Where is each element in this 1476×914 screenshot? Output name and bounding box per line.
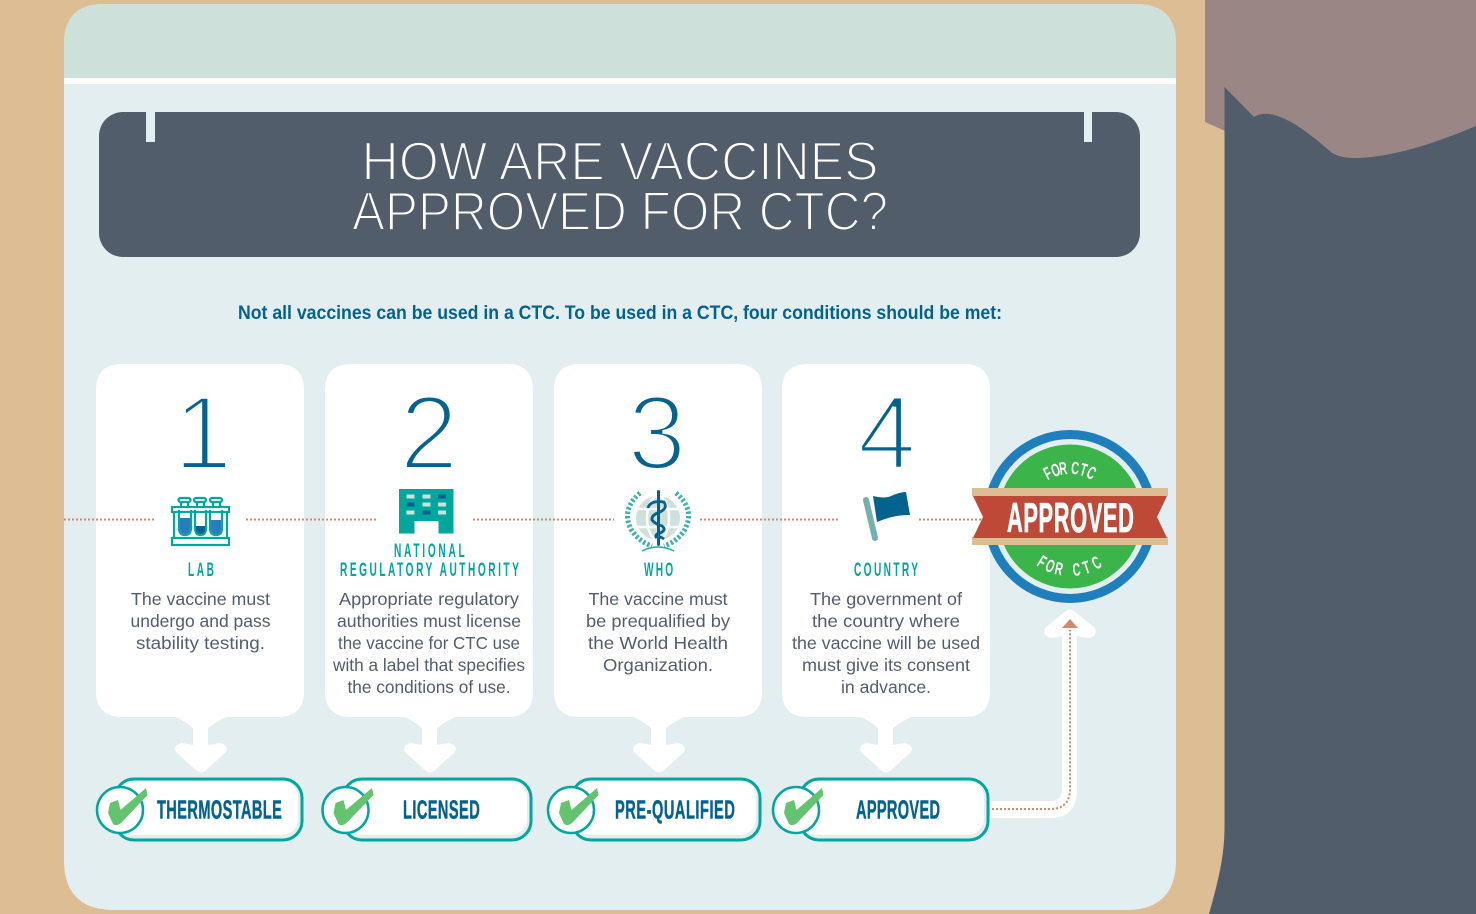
badge text top: C	[1083, 464, 1099, 484]
intro sentence: Not all vaccines can be used in a CTC. To be used in a CTC, four conditions should be met:	[238, 303, 1002, 324]
panel: step 2 national regulatory authority: the conditions of use.	[348, 677, 510, 697]
dark grey silhouette	[1209, 87, 1476, 914]
status tag: approved	[773, 779, 988, 840]
badge text top: O	[1049, 461, 1063, 482]
panel: step 3 WHO: The vaccine must	[588, 589, 728, 609]
mauve backdrop shape	[1205, 0, 1476, 170]
approved badge: APPROVED	[1007, 496, 1134, 542]
icon: regulatory building	[399, 489, 454, 534]
panel: step 2 national regulatory authority: NATIONAL	[394, 541, 465, 562]
status tag: licensed: LICENSED	[403, 796, 480, 825]
icon: flag	[866, 492, 910, 538]
panel: step 4 country: COUNTRY	[854, 560, 918, 581]
approved badge	[972, 434, 1168, 598]
status tag: approved: APPROVED	[856, 796, 940, 825]
panel: step 1 lab: LAB	[188, 560, 214, 581]
panel: step 2 national regulatory authority: with a label that specifies	[332, 655, 525, 675]
panel: step 1 lab: undergo and pass	[130, 611, 271, 631]
panel: step 4 country: in advance.	[841, 677, 931, 697]
badge text top: R	[1058, 459, 1069, 480]
status tag: thermostable: THERMOSTABLE	[157, 796, 282, 825]
panel: step 2 national regulatory authority: authorities must license	[337, 611, 521, 631]
badge text top: C	[1070, 459, 1080, 479]
title banner: HOW ARE VACCINES	[362, 131, 878, 192]
panel: step 4 country	[782, 364, 990, 772]
badge text top: T	[1077, 461, 1089, 481]
title banner: APPROVED FOR CTC?	[352, 181, 888, 242]
panel: step 2 national regulatory authority	[325, 364, 533, 772]
icon: WHO emblem	[628, 490, 688, 551]
badge text top: F	[1041, 464, 1056, 485]
connector arrow to approved badge	[990, 610, 1096, 818]
badge text bottom: O	[1042, 557, 1057, 578]
panel: step 3 WHO: be prequalified by	[586, 611, 730, 631]
panel: step 3 WHO: WHO	[644, 560, 673, 581]
badge text bottom: R	[1053, 560, 1065, 580]
panel: step 4 country: must give its consent	[802, 655, 970, 675]
badge text bottom: C	[1072, 561, 1082, 581]
title banner	[99, 112, 1140, 257]
status tag: thermostable	[97, 779, 302, 840]
status tag: pre-qualified: PRE-QUALIFIED	[615, 796, 735, 825]
panel: step 4 country: The government of	[810, 589, 962, 609]
icon: test tubes	[172, 498, 229, 545]
badge text bottom: C	[1089, 553, 1105, 574]
panel: step 4 country: 4	[858, 375, 916, 492]
badge text bottom	[1033, 553, 1105, 581]
panel: step 3 WHO: 3	[628, 375, 686, 492]
panel: step 2 national regulatory authority: REGULATORY AUTHORITY	[340, 560, 519, 581]
panel: step 1 lab	[96, 364, 304, 772]
panel: step 4 country: the vaccine will be used	[792, 633, 980, 653]
panel: step 2 national regulatory authority: the vaccine for CTC use	[338, 633, 520, 653]
badge text bottom: T	[1081, 558, 1093, 579]
panel: step 3 WHO: Organization.	[603, 655, 713, 675]
main panel	[64, 4, 1176, 910]
panel: step 3 WHO: the World Health	[588, 633, 728, 653]
badge text top	[1041, 459, 1099, 485]
dotted connector line	[64, 518, 985, 520]
panel: step 1 lab: The vaccine must	[131, 589, 270, 609]
status tag: pre-qualified	[548, 779, 760, 840]
badge text bottom: F	[1033, 553, 1049, 573]
panel: step 1 lab: stability testing.	[136, 633, 265, 653]
status tag: licensed	[322, 779, 531, 840]
panel: step 2 national regulatory authority: 2	[400, 375, 458, 492]
panel: step 2 national regulatory authority: Appropriate regulatory	[339, 589, 519, 609]
panel: step 4 country: the country where	[812, 611, 960, 631]
panel: step 3 WHO	[554, 364, 762, 772]
panel: step 1 lab: 1	[174, 375, 232, 492]
